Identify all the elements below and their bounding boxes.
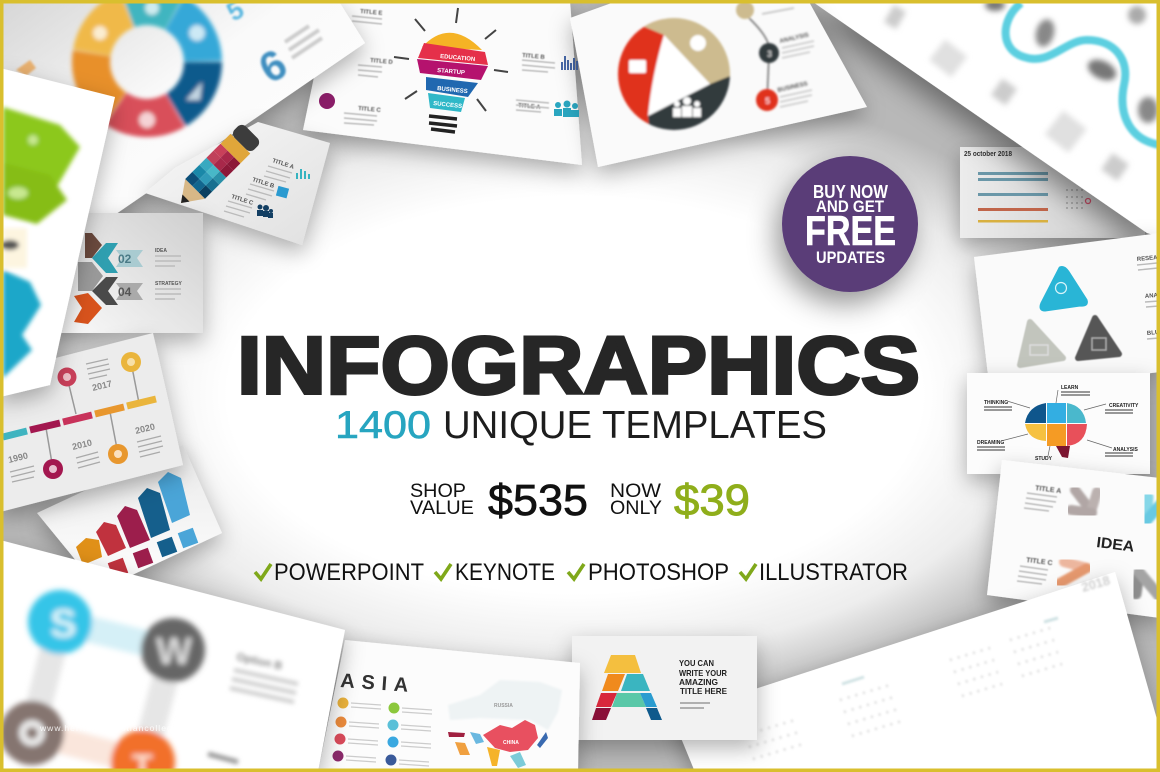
slide: chevrons [55, 213, 203, 333]
swot text [208, 651, 298, 762]
idea labels [1017, 485, 1062, 584]
icon: check [740, 564, 756, 579]
chevrons: 04 [118, 285, 132, 299]
icon: light bulb [417, 33, 488, 132]
icon: check [255, 564, 271, 579]
pencil labels: TITLE C [230, 194, 254, 207]
timeline: steps: ANALYSIS [779, 32, 809, 45]
badge: free updates: UPDATES [816, 248, 885, 267]
pencil labels [224, 158, 295, 217]
icon: tan circle [690, 35, 706, 51]
timeline years: 1990 [7, 450, 29, 465]
swot text: Option B [235, 651, 283, 673]
brain labels: LEARN [1061, 385, 1079, 391]
blue arrow [3, 270, 41, 378]
price: shop value [410, 476, 588, 525]
badge: free updates: BUY NOW [813, 182, 888, 202]
text: amazing title: WRITE YOUR [679, 668, 727, 678]
pencil labels: TITLE B [251, 177, 275, 190]
bulb labels: TITLE E [360, 9, 383, 17]
label: 6: 6 [251, 40, 295, 92]
slide: arrows [37, 445, 222, 590]
price: now only: ONLY [610, 498, 662, 519]
icon: light bulb: SUCCESS [433, 101, 462, 110]
timeline years: 2017 [91, 378, 113, 393]
slide: triangles [974, 233, 1160, 392]
icon: people [554, 100, 579, 117]
icon: grey triangle [1020, 322, 1063, 365]
idea heading: IDEA [1096, 534, 1135, 556]
subtitle: 1400 [335, 404, 431, 447]
timeline stems [46, 362, 139, 469]
timeline: steps [736, 1, 814, 111]
brain labels: STUDY [1035, 456, 1053, 462]
icon: light bulb: BUSINESS [437, 86, 468, 95]
timeline: steps: 3 [767, 49, 772, 59]
bulb labels: TITLE D [370, 58, 394, 66]
map of Asia: CHINA [503, 740, 519, 746]
map of Asia [448, 680, 562, 768]
swot diagram: W [156, 631, 192, 673]
slide: light bulb [303, 0, 582, 165]
text: amazing title: TITLE HERE [680, 686, 727, 696]
text: amazing title [679, 658, 727, 708]
slide: brain [967, 373, 1150, 474]
chevron labels: IDEA [155, 248, 167, 254]
badge: free updates: FREE [805, 207, 896, 254]
pencil labels: TITLE A [271, 158, 295, 171]
price: shop value: $535 [488, 476, 588, 525]
timeline nodes [43, 352, 141, 479]
slide: pie chart [570, 0, 867, 167]
slide: green arrows [0, 68, 115, 397]
chevron labels: STRATEGY [155, 281, 183, 287]
slide: pencil [145, 122, 330, 245]
icon: small square [276, 186, 289, 198]
bulb labels: TITLE C [358, 106, 382, 114]
software list: POWERPOINT [274, 559, 424, 586]
timeline: steps: 5 [765, 96, 770, 106]
icon: dark triangle [1078, 318, 1119, 358]
slide: schedule: 25 october 2018 [964, 149, 1012, 158]
map of Asia: RUSSIA [494, 703, 513, 709]
icon: brain puzzle [1025, 403, 1087, 458]
icon: pencil [171, 122, 262, 213]
icon: letter A [592, 655, 662, 720]
timeline: steps: BUSINESS [777, 81, 808, 94]
icon: teal triangle [1041, 268, 1086, 310]
icon: bar chart [562, 56, 577, 70]
timeline years: 2010 [71, 437, 93, 452]
idea labels: TITLE C [1026, 557, 1053, 567]
bulb labels: TITLE B [522, 53, 546, 61]
icon: small people [257, 204, 273, 218]
idea labels: TITLE A [1035, 485, 1062, 495]
icon: check [568, 564, 584, 579]
icon: teal petals [1146, 497, 1160, 521]
brain labels: THINKING [984, 400, 1008, 406]
slide: timeline [0, 333, 183, 512]
price: now only: NOW [610, 481, 661, 502]
chevrons: 02 [118, 252, 132, 266]
icon: orange petals [1060, 562, 1087, 583]
badge: free updates [782, 156, 918, 292]
timeline bar [3, 399, 156, 437]
icon: briefcase [629, 60, 646, 73]
triangle labels [1137, 254, 1160, 339]
badge: free updates: AND GET [816, 197, 885, 216]
icon: people [673, 97, 701, 117]
legend [332, 698, 432, 766]
timeline years [7, 359, 163, 482]
ring chart [69, 0, 225, 140]
software list: ILLUSTRATOR [759, 559, 908, 586]
slide: calendar [672, 572, 1160, 772]
software list [255, 559, 908, 586]
chevron labels [155, 248, 183, 299]
software list: KEYNOTE [455, 559, 555, 586]
chevrons [74, 233, 143, 324]
bulb labels [344, 9, 555, 125]
arrow columns [76, 472, 198, 578]
price: now only: $39 [674, 476, 750, 525]
text: amazing title: YOU CAN [679, 658, 714, 668]
swot diagram [0, 590, 205, 772]
brain labels: ANALYSIS [1113, 447, 1138, 453]
icon: grey petals [1136, 572, 1160, 597]
heading: ASIA: ASIA [340, 670, 409, 697]
green arrow two [3, 163, 67, 224]
slide: schedule [960, 147, 1145, 238]
pie chart [616, 16, 732, 132]
title: INFOGRAPHICS [237, 320, 920, 412]
icon: light bulb: STARTUP [437, 68, 465, 76]
slide: idea [987, 460, 1160, 618]
green arrow one [3, 107, 80, 190]
brain labels [977, 385, 1139, 462]
timeline years: 2020 [134, 421, 156, 436]
slide: circle chart [0, 0, 365, 262]
bulb labels: TITLE A [518, 103, 541, 111]
icon: pie [319, 93, 335, 109]
slide: letter A [572, 636, 757, 740]
text: amazing title: AMAZING [679, 677, 718, 687]
watermark: www.heritagechristiancollege.com [39, 723, 200, 733]
icon: light bulb: EDUCATION [440, 54, 475, 63]
subtitle: UNIQUE TEMPLATES [443, 404, 827, 447]
brain labels: DREAMING [977, 440, 1004, 446]
slide: Asia [318, 640, 580, 772]
price: shop value: VALUE [410, 498, 474, 519]
icon: bulb rays [394, 8, 508, 111]
brain labels: CREATIVITY [1109, 403, 1139, 409]
calendar details [735, 572, 1112, 759]
icon: small chart [297, 169, 309, 179]
label: 6 [16, 0, 322, 92]
price: shop value: SHOP [410, 481, 466, 502]
swot diagram: S [50, 602, 77, 646]
calendar details: 2018 [1080, 572, 1112, 595]
icon: check [435, 564, 451, 579]
price: now only [610, 476, 750, 525]
slide: SWOT [0, 540, 345, 772]
software list: PHOTOSHOP [588, 559, 729, 586]
icon: brown petals [1071, 490, 1097, 513]
slide: wavy road [810, 0, 1160, 237]
